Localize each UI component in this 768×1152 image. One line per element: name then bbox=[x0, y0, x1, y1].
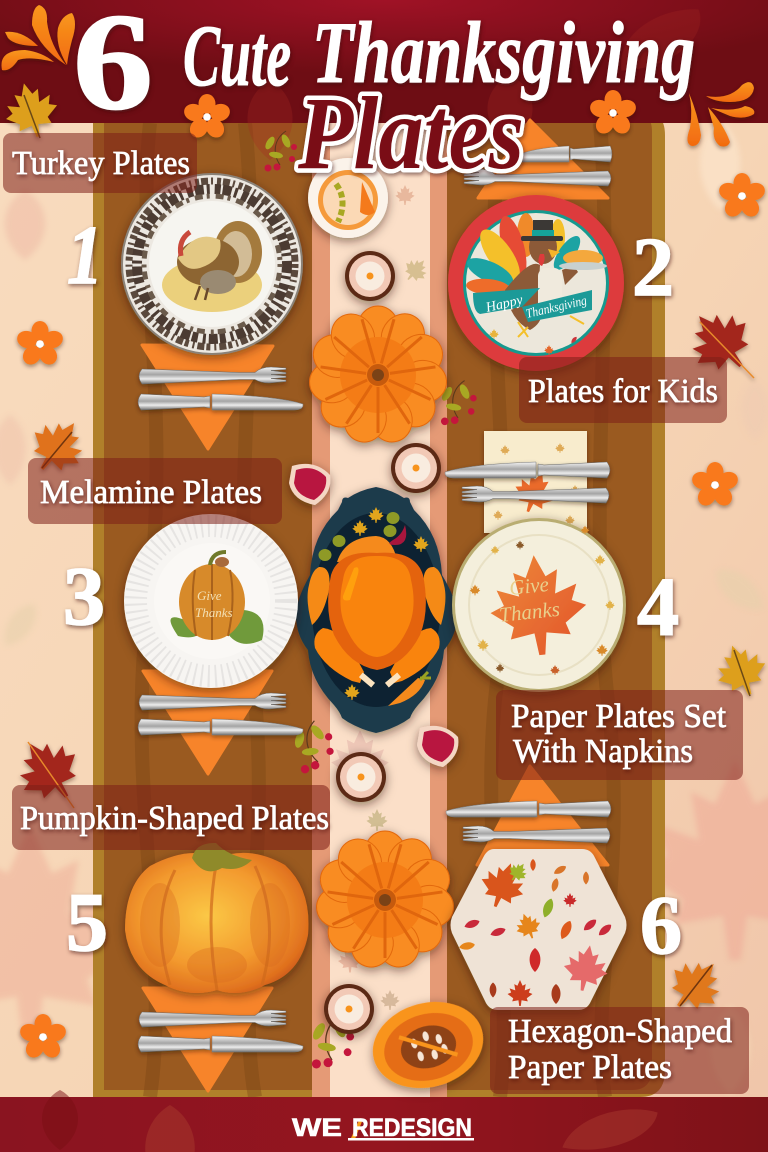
candles bbox=[324, 251, 441, 1034]
plate 3: melamine plate: Give bbox=[197, 588, 222, 603]
fork: plate 6 bbox=[463, 826, 610, 843]
label: Paper Plates Set With Napkins: With Napkins bbox=[513, 733, 693, 770]
plate 2: plate for kids bbox=[448, 195, 624, 371]
fork: plate 3 bbox=[139, 693, 286, 710]
title: Cute Thanksgiving: Cute bbox=[183, 8, 291, 105]
beet bowls bbox=[289, 464, 458, 767]
plate 6: hexagon paper plate bbox=[450, 849, 626, 1010]
roast turkey platter bbox=[296, 487, 457, 733]
berries sprigs bbox=[263, 131, 477, 1068]
knife: plate 3 bbox=[138, 719, 303, 735]
fork: plate 1 bbox=[139, 367, 286, 384]
decorative leaf: orange left bbox=[20, 408, 96, 484]
plate 4: paper plate with maple leaf: Thanks bbox=[498, 597, 561, 627]
wooden table bbox=[93, 110, 665, 1097]
napkin: plate 1 bbox=[142, 345, 273, 449]
pumpkin centrepiece bottom bbox=[313, 831, 456, 972]
label: Pumpkin-Shaped Plates bbox=[12, 785, 330, 850]
number 5: 5 bbox=[66, 876, 108, 969]
number 6: 6 bbox=[640, 879, 682, 972]
knife: plate 6 bbox=[446, 801, 611, 817]
number 4: 4 bbox=[637, 561, 679, 654]
decorative leaf: orange right bottom bbox=[658, 947, 734, 1023]
label: Turkey Plates bbox=[3, 133, 197, 193]
knife: plate 4 bbox=[445, 462, 610, 478]
small vegetable plate bbox=[308, 158, 388, 238]
label: Melamine Plates bbox=[28, 458, 282, 524]
napkin: plate 5 bbox=[143, 988, 272, 1091]
napkin: plate 3 bbox=[143, 671, 272, 774]
patterned napkin: plate 4 bbox=[484, 431, 587, 533]
number 1: 1 bbox=[67, 209, 103, 302]
number 2: 2 bbox=[632, 221, 674, 314]
knife: plate 5 bbox=[138, 1036, 303, 1052]
table runner bbox=[312, 110, 447, 1097]
fork: plate 5 bbox=[139, 1010, 286, 1027]
napkin: plate 2 bbox=[478, 120, 608, 198]
fork: plate 4 bbox=[462, 486, 609, 503]
orange splash left bbox=[1, 5, 75, 70]
napkin: plate 6 bbox=[477, 766, 608, 865]
logo: We Redesign: REDESIGN bbox=[352, 1114, 472, 1142]
plate 3: melamine plate: Thanks bbox=[195, 605, 233, 620]
label: Hexagon-Shaped Paper Plates bbox=[490, 1007, 749, 1094]
top banner bbox=[0, 0, 768, 160]
logo: We Redesign bbox=[292, 1114, 474, 1142]
plate 1: turkey plate bbox=[122, 174, 302, 354]
decorative leaf: yellow top left bbox=[0, 77, 64, 143]
decorative leaf: yellow right bbox=[709, 637, 768, 703]
label: Pumpkin-Shaped Plates: Pumpkin-Shaped Plates bbox=[20, 800, 329, 837]
title: Plates: Plates bbox=[297, 76, 524, 191]
title: Cute Thanksgiving bbox=[183, 5, 695, 105]
label: Melamine Plates: Melamine Plates bbox=[40, 474, 262, 511]
knife: plate 2 bbox=[516, 146, 612, 162]
label: Paper Plates Set With Napkins bbox=[496, 690, 743, 780]
plate 4: paper plate with maple leaf bbox=[452, 518, 626, 692]
decorative leaf: red left bbox=[4, 725, 92, 815]
decorative leaf: red right bbox=[675, 296, 765, 386]
plate 5: pumpkin-shaped plate bbox=[125, 843, 309, 993]
knife: plate 1 bbox=[138, 394, 303, 410]
cut pumpkin half bbox=[363, 990, 493, 1100]
label: Plates for Kids bbox=[519, 357, 727, 423]
plate 3: melamine plate bbox=[124, 514, 298, 688]
label: Hexagon-Shaped Paper Plates: Paper Plates bbox=[508, 1049, 672, 1086]
label: Plates for Kids: Plates for Kids bbox=[528, 373, 718, 410]
pumpkin centrepiece top bbox=[306, 306, 449, 447]
label: Paper Plates Set With Napkins: Paper Plates Set bbox=[511, 698, 727, 735]
fork: plate 2 bbox=[464, 169, 611, 186]
number 3: 3 bbox=[63, 550, 105, 643]
bottom banner bbox=[0, 1090, 768, 1152]
orange splash right bbox=[687, 82, 754, 146]
label: Hexagon-Shaped Paper Plates: Hexagon-Shaped bbox=[508, 1013, 732, 1050]
plate 2: plate for kids: Thanksgiving bbox=[524, 292, 589, 321]
label: Turkey Plates: Turkey Plates bbox=[12, 145, 190, 182]
logo: We Redesign: WE bbox=[292, 1114, 342, 1142]
plate 2: plate for kids: Happy bbox=[484, 293, 525, 316]
plate 4: paper plate with maple leaf: Give bbox=[508, 572, 550, 600]
